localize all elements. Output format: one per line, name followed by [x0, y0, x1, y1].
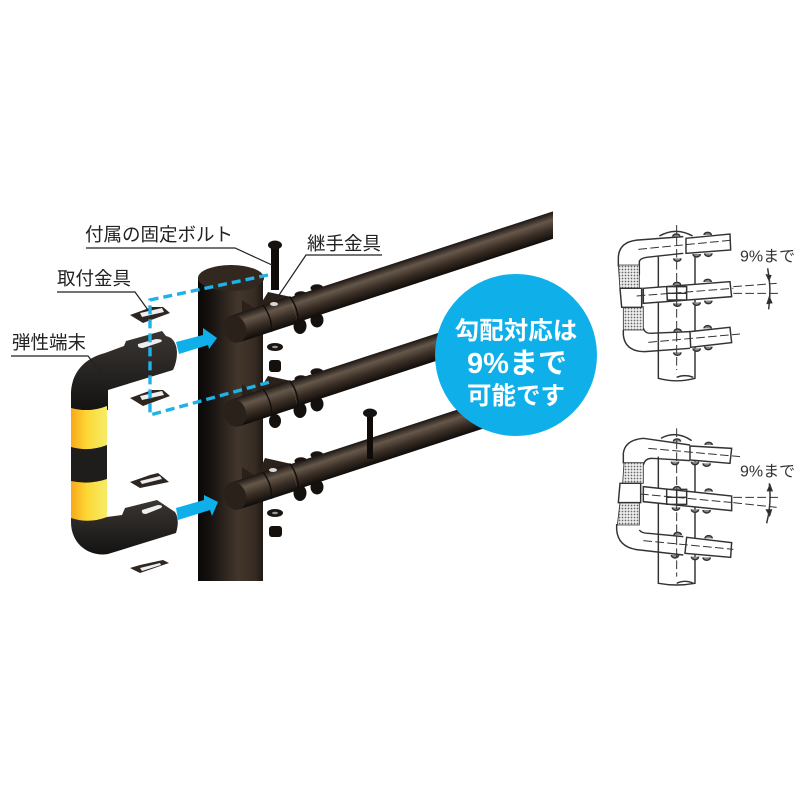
slope label: 9%まで [740, 463, 795, 480]
icon: upper washer and nut [267, 343, 283, 372]
rails [643, 446, 732, 557]
label: fixing bolt: 付属の固定ボルト [85, 224, 233, 245]
bolts [673, 232, 712, 355]
diagram: downward slope [617, 428, 795, 585]
guard rail post [198, 265, 264, 581]
lower yellow band [71, 479, 107, 521]
slope label: 9%まで [740, 248, 795, 265]
lower slot [142, 505, 162, 514]
callout: slope capability: 可能です [467, 382, 565, 410]
label: mounting bracket [57, 268, 148, 310]
icon: lower washer and nut [267, 509, 283, 537]
bolts [671, 439, 712, 560]
hatched bands [618, 265, 643, 330]
callout: slope capability [435, 274, 597, 436]
callout: slope capability: 勾配対応は [455, 317, 577, 345]
white centre band [618, 483, 641, 503]
top rail assembly [228, 211, 553, 343]
callout: slope capability: 9%まで [467, 348, 567, 380]
upper slot [138, 339, 162, 348]
icon: top fixing bolt [268, 240, 282, 290]
label: elastic end [11, 332, 102, 374]
centre lines [640, 428, 778, 577]
bottom black elbow [71, 500, 178, 554]
elastic end piece [71, 331, 178, 554]
centre lines [637, 225, 778, 370]
label: fixing bolt [85, 224, 272, 265]
icon: mounting bracket 2 [130, 390, 170, 406]
icon: mounting bracket 3 [130, 473, 169, 488]
diagram: upward slope [618, 225, 795, 381]
upper yellow band [71, 406, 107, 452]
arrow: upper insertion arrow [176, 328, 217, 354]
label: joint fitting [277, 233, 382, 298]
middle black band [71, 445, 107, 484]
label: mounting bracket: 取付金具 [57, 268, 131, 289]
rails [643, 234, 732, 347]
top black elbow [71, 331, 177, 410]
post outline [658, 435, 695, 585]
hatched bands [617, 463, 643, 525]
label: joint fitting: 継手金具 [307, 233, 381, 254]
white centre band [620, 288, 642, 307]
dashed alignment guide [150, 275, 270, 415]
bottom rail assembly [220, 399, 496, 513]
post outline [658, 231, 695, 381]
arrow: lower insertion arrow [176, 495, 218, 520]
angle marker [767, 483, 770, 523]
icon: mounting bracket 1 [130, 307, 170, 323]
end piece outline [617, 438, 690, 555]
icon: mounting bracket 4 [130, 560, 169, 573]
angle marker [768, 268, 770, 309]
icon: lower fixing bolt [363, 408, 377, 459]
end piece outline [618, 237, 690, 352]
label: elastic end: 弾性端末 [12, 332, 86, 353]
middle rail assembly [220, 325, 467, 430]
